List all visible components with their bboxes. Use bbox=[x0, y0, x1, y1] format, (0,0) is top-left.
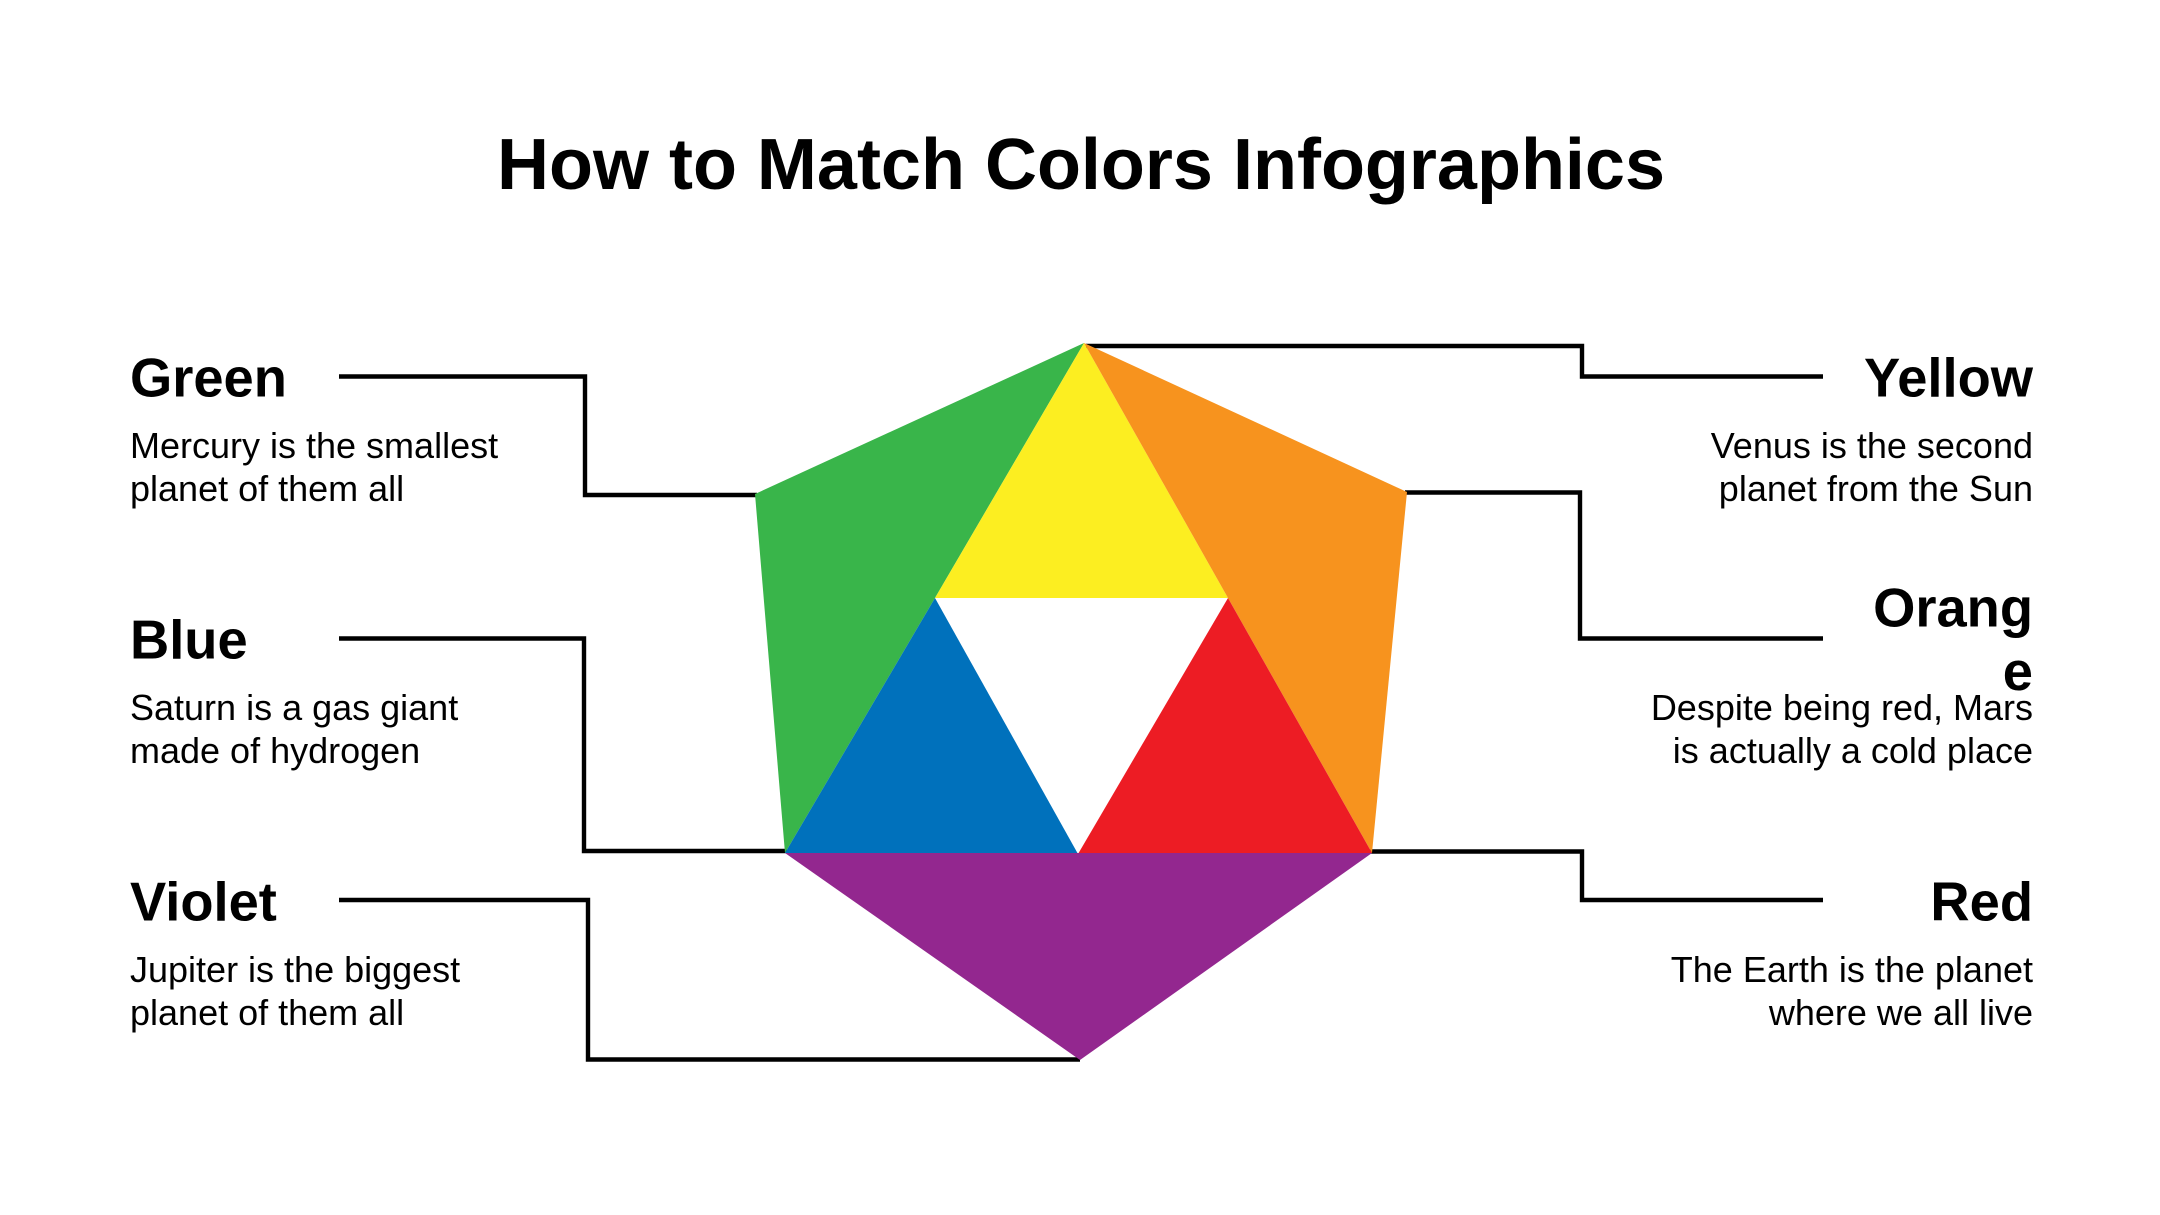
color wheel hexagon bbox=[755, 343, 1407, 1060]
label: red bbox=[1671, 872, 2033, 1033]
connector: red bbox=[1370, 852, 1823, 900]
heading: orange: Orang bbox=[1873, 578, 2033, 638]
description: orange: is actually a cold place bbox=[1673, 730, 2033, 771]
connector: yellow bbox=[1086, 346, 1823, 376]
segment: yellow bbox=[935, 343, 1228, 598]
heading: violet: Violet bbox=[130, 872, 277, 932]
connector: green bbox=[339, 376, 757, 495]
label: orange bbox=[1651, 578, 2033, 771]
segment: blue bbox=[785, 598, 1078, 854]
heading: red: Red bbox=[1930, 872, 2033, 932]
description: red: where we all live bbox=[1768, 992, 2033, 1033]
title: How to Match Colors Infographics bbox=[497, 125, 1665, 205]
label: blue bbox=[130, 610, 458, 771]
segment: violet bbox=[785, 853, 1372, 1060]
heading: yellow: Yellow bbox=[1864, 348, 2034, 408]
connector: blue bbox=[339, 638, 787, 851]
description: orange: Despite being red, Mars bbox=[1651, 687, 2033, 728]
heading: green: Green bbox=[130, 348, 287, 408]
description: green: planet of them all bbox=[130, 468, 404, 509]
heading: orange: e bbox=[2003, 641, 2033, 702]
connector: violet bbox=[339, 900, 1080, 1060]
description: violet: Jupiter is the biggest bbox=[130, 949, 460, 990]
segment: orange bbox=[1084, 343, 1407, 853]
label: yellow bbox=[1711, 348, 2034, 509]
connector: orange bbox=[1405, 492, 1823, 638]
description: green: Mercury is the smallest bbox=[130, 425, 498, 466]
label: green bbox=[130, 348, 498, 509]
label: violet bbox=[130, 872, 460, 1033]
description: yellow: planet from the Sun bbox=[1719, 468, 2033, 509]
segment: green bbox=[755, 343, 1084, 853]
description: red: The Earth is the planet bbox=[1671, 949, 2033, 990]
segment: red bbox=[1078, 598, 1372, 854]
description: violet: planet of them all bbox=[130, 992, 404, 1033]
description: blue: made of hydrogen bbox=[130, 730, 420, 771]
description: blue: Saturn is a gas giant bbox=[130, 687, 458, 728]
heading: blue: Blue bbox=[130, 610, 248, 670]
description: yellow: Venus is the second bbox=[1711, 425, 2033, 466]
